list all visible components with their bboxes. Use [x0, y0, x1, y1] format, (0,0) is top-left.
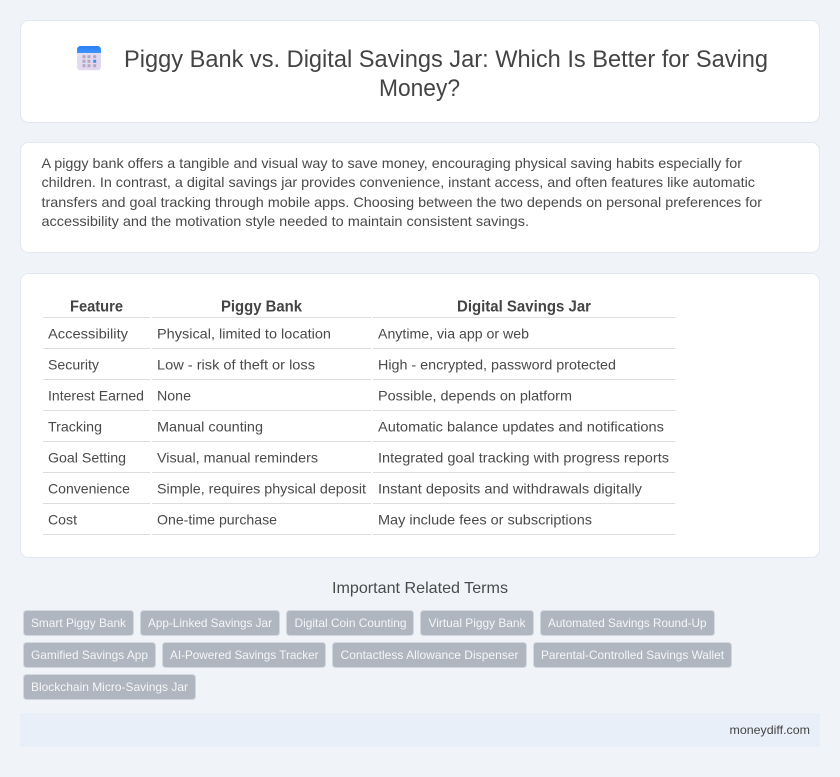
intro paragraph: children. In contrast, a digital savings jar provides convenience, instant access, and often features like automatic	[42, 174, 755, 190]
intro paragraph: accessibility and the motivation style needed to maintain consistent savings.	[42, 213, 529, 229]
title	[124, 46, 768, 102]
panel: header	[20, 20, 820, 122]
tag: parental-controlled savings wallet: Parental-Controlled Savings Wallet	[541, 648, 725, 662]
row: interest earned: Interest Earned	[48, 388, 144, 404]
row: tracking: Manual counting	[157, 418, 263, 434]
tag: contactless allowance dispenser	[332, 642, 526, 668]
row: accessibility: Anytime, via app or web	[378, 326, 529, 342]
icon: calendar	[77, 46, 101, 70]
row: goal setting	[43, 450, 675, 473]
row: accessibility: Accessibility	[48, 326, 128, 342]
row: tracking: Automatic balance updates and notifications	[378, 418, 664, 434]
tag: gamified savings app	[24, 642, 156, 668]
row: goal setting: Integrated goal tracking with progress reports	[378, 450, 669, 466]
footer bar	[20, 713, 820, 747]
row: security: High - encrypted, password protected	[378, 356, 616, 372]
panel: introduction	[20, 142, 820, 252]
tag: app-linked savings jar: App-Linked Savings Jar	[148, 616, 272, 630]
row: convenience: Convenience	[48, 480, 130, 496]
intro paragraph: A piggy bank offers a tangible and visual way to save money, encouraging physical saving habits especially for	[42, 155, 742, 171]
tag: automated savings round-up: Automated Savings Round-Up	[548, 616, 707, 630]
tag: contactless allowance dispenser: Contactless Allowance Dispenser	[340, 648, 519, 662]
row: interest earned	[43, 388, 675, 411]
tag: smart piggy bank: Smart Piggy Bank	[31, 616, 127, 630]
row: security: Low - risk of theft or loss	[157, 356, 315, 372]
row: interest earned: Possible, depends on platform	[378, 388, 572, 404]
row: cost: May include fees or subscriptions	[378, 512, 592, 528]
row: convenience: Simple, requires physical deposit	[157, 480, 366, 496]
row: goal setting: Visual, manual reminders	[157, 450, 318, 466]
table header row	[43, 298, 675, 318]
tag: app-linked savings jar	[140, 610, 280, 636]
row: security: Security	[48, 356, 99, 372]
tag: virtual piggy bank: Virtual Piggy Bank	[428, 616, 526, 630]
title: Piggy Bank vs. Digital Savings Jar: Which Is Better for Saving	[124, 46, 768, 73]
row: security	[43, 356, 675, 380]
table header row: Digital Savings Jar	[457, 298, 591, 316]
tag: blockchain micro-savings jar: Blockchain Micro-Savings Jar	[31, 680, 188, 694]
tag: digital coin counting	[286, 610, 414, 636]
intro paragraph: transfers and goal tracking through mobile apps. Choosing between the two depends on personal preferences for	[42, 194, 762, 210]
tag: ai-powered savings tracker: AI-Powered Savings Tracker	[170, 648, 319, 662]
table header row: Piggy Bank	[221, 298, 302, 316]
tag: smart piggy bank	[24, 610, 134, 636]
tag: virtual piggy bank	[420, 610, 534, 636]
footer source text: moneydiff.com	[730, 723, 810, 737]
title: Money?	[379, 75, 460, 102]
row: tracking	[43, 418, 675, 442]
row: convenience	[43, 480, 675, 504]
row: interest earned: None	[157, 388, 191, 404]
tag: parental-controlled savings wallet	[534, 642, 732, 668]
row: cost	[43, 512, 675, 535]
heading: important related terms: Important Related Terms	[332, 580, 508, 597]
row: cost: Cost	[48, 512, 77, 528]
row: convenience: Instant deposits and withdrawals digitally	[378, 480, 642, 496]
panel: comparison table	[20, 274, 820, 558]
tag: blockchain micro-savings jar	[24, 674, 196, 700]
row: accessibility	[43, 326, 675, 349]
tag: digital coin counting: Digital Coin Counting	[294, 616, 406, 630]
related term tags	[24, 610, 732, 700]
table header row: Feature	[70, 298, 123, 316]
tag: automated savings round-up	[540, 610, 714, 636]
row: accessibility: Physical, limited to location	[157, 326, 331, 342]
tag: gamified savings app: Gamified Savings App	[31, 648, 148, 662]
row: tracking: Tracking	[48, 418, 102, 434]
tag: ai-powered savings tracker	[162, 642, 326, 668]
intro paragraph	[42, 155, 762, 229]
row: cost: One-time purchase	[157, 512, 277, 528]
row: goal setting: Goal Setting	[48, 450, 126, 466]
